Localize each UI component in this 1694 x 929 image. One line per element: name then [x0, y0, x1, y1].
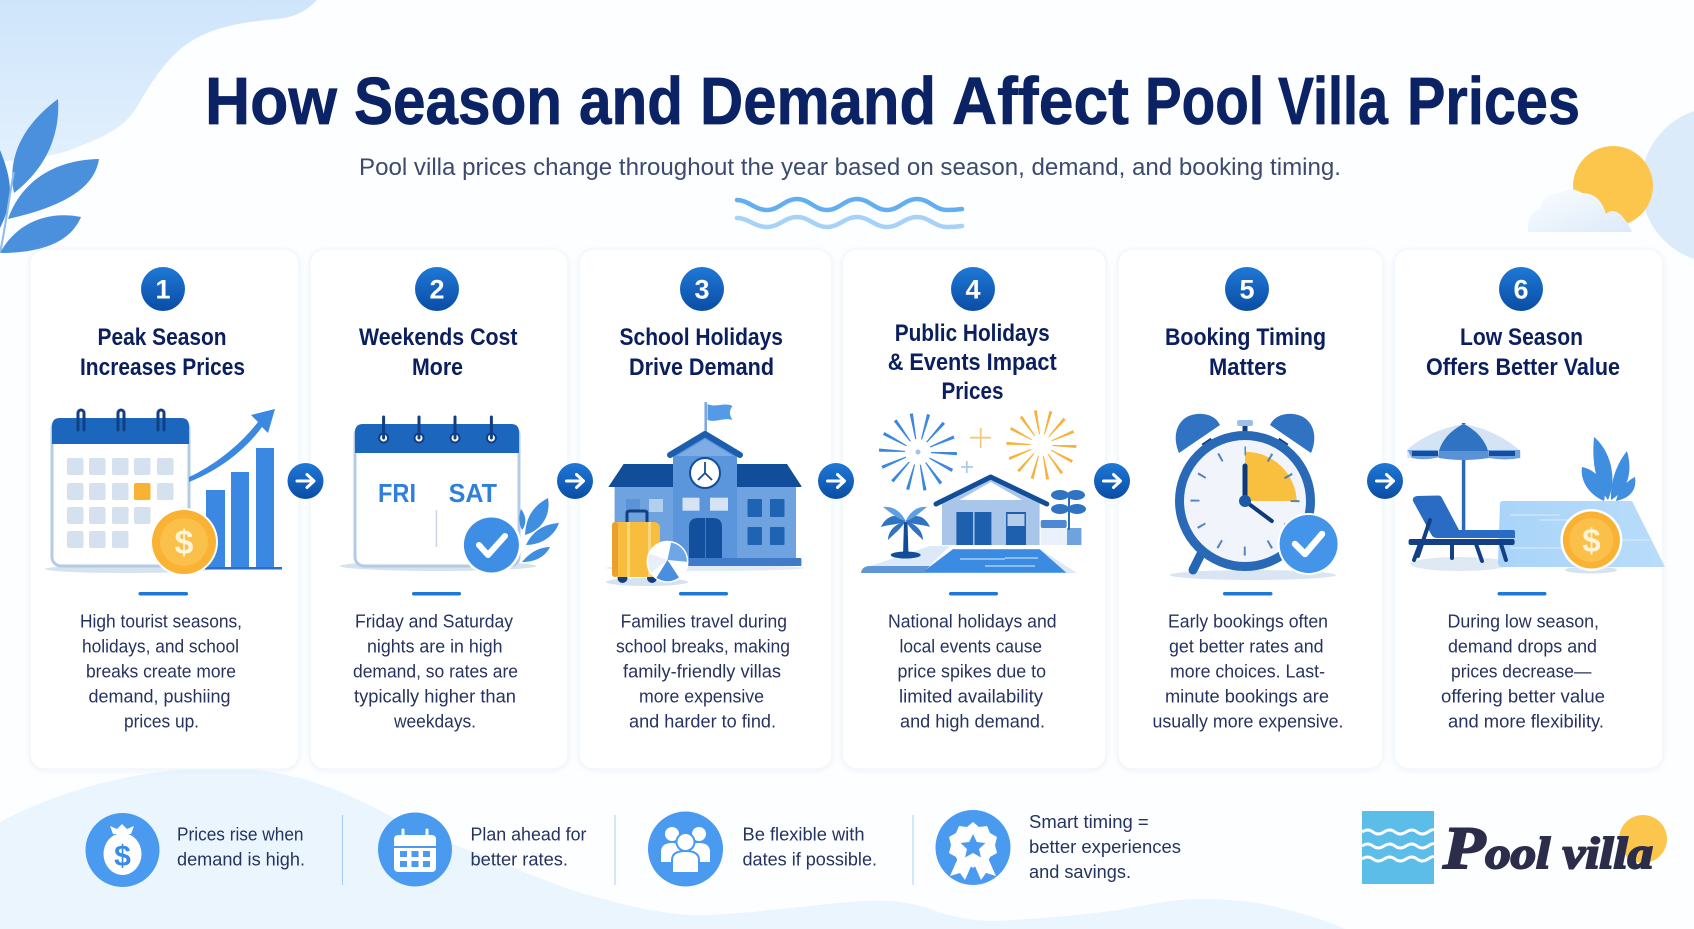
- arrow 5: [1367, 463, 1403, 499]
- description: and more flexibility.: [1448, 712, 1604, 732]
- description: and harder to find.: [629, 712, 776, 732]
- heading: [888, 320, 1057, 405]
- description: During low season,: [1448, 612, 1599, 632]
- text: [177, 824, 305, 870]
- badge 3: [680, 267, 724, 311]
- title: [205, 64, 1580, 139]
- heading: [1165, 324, 1326, 381]
- description: holidays, and school: [82, 636, 239, 656]
- description: Early bookings often: [1168, 612, 1328, 632]
- badge 2: 2: [429, 274, 445, 304]
- icon: money bag: $: [114, 840, 131, 873]
- arrow 1: [288, 463, 324, 499]
- panel: booking timing: [1118, 249, 1383, 769]
- illustration: fireworks over pool villa: [861, 422, 1086, 573]
- text: Plan ahead for: [470, 824, 586, 844]
- heading: [359, 324, 518, 381]
- heading: [1426, 324, 1620, 381]
- logo: Pool villa: [1362, 811, 1667, 884]
- description: [1152, 612, 1344, 732]
- title: Season: [354, 64, 562, 139]
- illustration: weekend calendar with check: [340, 417, 559, 575]
- illustration: school with suitcase and beach ball: [606, 402, 804, 586]
- icon: sun and cloud: [1528, 146, 1653, 232]
- heading: & Events Impact: [888, 349, 1057, 376]
- wave divider: [737, 199, 962, 227]
- description: get better rates and: [1169, 636, 1324, 656]
- heading: Weekends Cost: [359, 324, 518, 351]
- panel: low season: [1394, 249, 1665, 769]
- panel: school holidays: [579, 249, 832, 769]
- text: Smart timing =: [1029, 812, 1149, 832]
- subtitle: Pool villa prices change throughout the year based on season, demand, and booking timing.: [359, 154, 1341, 181]
- title: Affect: [952, 64, 1129, 139]
- icon: leaves: [0, 99, 99, 253]
- description: limited availability: [899, 686, 1043, 706]
- arrow 2: [557, 463, 593, 499]
- title: and: [579, 64, 683, 139]
- divider dash: [1223, 592, 1272, 596]
- description: breaks create more: [86, 662, 236, 682]
- description: local events cause: [900, 636, 1042, 656]
- illustration: lounge chair, umbrella, pool and coin: $: [1582, 522, 1601, 559]
- heading: School Holidays: [620, 324, 783, 351]
- illustration: weekend calendar with check: FRI: [378, 478, 416, 508]
- title: Demand: [700, 64, 936, 139]
- heading: Offers Better Value: [1426, 354, 1620, 381]
- description: nights are in high: [367, 636, 502, 656]
- text: Prices rise when: [177, 824, 304, 844]
- logo: Pool villa: Pool villa: [1442, 815, 1653, 881]
- description: [888, 612, 1057, 732]
- description: Families travel during: [621, 612, 787, 632]
- heading: Peak Season: [98, 324, 226, 351]
- text: [1029, 812, 1181, 882]
- icon: calendar: [378, 812, 452, 886]
- description: demand drops and: [1448, 636, 1597, 656]
- panel: public holidays: [842, 249, 1106, 769]
- divider dash: [679, 592, 728, 596]
- text: [742, 824, 877, 870]
- panel: weekends: [310, 249, 568, 769]
- description: Friday and Saturday: [355, 612, 513, 632]
- heading: Low Season: [1460, 324, 1583, 351]
- divider dash: [949, 592, 998, 596]
- divider dash: [1498, 592, 1546, 596]
- badge 1: [141, 267, 185, 311]
- description: more expensive: [639, 686, 764, 706]
- heading: Increases Prices: [80, 354, 245, 381]
- heading: More: [412, 354, 463, 381]
- tip: be flexible: [648, 812, 877, 886]
- title: Villa: [1278, 64, 1389, 139]
- background blob: top-left: [0, 0, 317, 161]
- heading: [80, 324, 245, 381]
- icon: people: [648, 812, 723, 886]
- text: Be flexible with: [742, 824, 864, 844]
- description: prices decrease—: [1451, 662, 1591, 682]
- text: dates if possible.: [742, 850, 877, 870]
- tip: plan ahead: [378, 812, 586, 886]
- description: National holidays and: [888, 612, 1057, 632]
- description: [1441, 612, 1605, 732]
- background blob: bottom: [0, 768, 1345, 929]
- arrow 4: [1094, 463, 1130, 499]
- illustration: lounge chair, umbrella, pool and coin: [1407, 423, 1665, 574]
- badge 4: [951, 267, 995, 311]
- badge 4: 4: [965, 274, 981, 304]
- description: more choices. Last-: [1170, 662, 1325, 682]
- illustration: weekend calendar with check: SAT: [449, 478, 497, 508]
- description: typically higher than: [354, 686, 516, 706]
- description: usually more expensive.: [1152, 712, 1344, 732]
- description: offering better value: [1441, 686, 1605, 706]
- heading: Booking Timing: [1165, 324, 1326, 351]
- description: and high demand.: [900, 712, 1045, 732]
- description: school breaks, making: [616, 636, 790, 656]
- badge 2: [415, 267, 459, 311]
- badge 6: [1499, 267, 1543, 311]
- badge 3: 3: [694, 274, 710, 304]
- illustration: alarm clock with check: [1170, 414, 1340, 580]
- divider dash: [138, 592, 188, 596]
- text: better experiences: [1029, 837, 1181, 857]
- panel: peak season: [30, 249, 299, 769]
- description: [616, 612, 790, 732]
- title: Prices: [1407, 64, 1580, 139]
- background blob: right: [1641, 107, 1694, 263]
- badge 5: [1225, 267, 1269, 311]
- badge 6: 6: [1513, 274, 1529, 304]
- description: minute bookings are: [1165, 686, 1329, 706]
- description: [353, 612, 518, 732]
- heading: [620, 324, 783, 381]
- description: weekdays.: [393, 712, 476, 732]
- description: family-friendly villas: [623, 662, 781, 682]
- text: better rates.: [470, 850, 568, 870]
- badge 1: 1: [155, 274, 171, 304]
- icon: award badge: [936, 810, 1010, 885]
- text: [470, 824, 586, 870]
- heading: Public Holidays: [895, 320, 1050, 347]
- icon: money bag: [86, 813, 160, 887]
- text: demand is high.: [177, 850, 305, 870]
- tip: prices rise: [86, 813, 305, 887]
- description: [80, 612, 242, 732]
- heading: Drive Demand: [629, 354, 774, 381]
- description: prices up.: [124, 712, 199, 732]
- illustration: calendar with rising bars and coin: [45, 409, 282, 576]
- description: demand, pushiing: [88, 686, 230, 706]
- description: price spikes due to: [898, 662, 1046, 682]
- heading: Matters: [1209, 354, 1287, 381]
- text: and savings.: [1029, 862, 1131, 882]
- badge 5: 5: [1239, 274, 1255, 304]
- title: How: [205, 64, 338, 139]
- description: High tourist seasons,: [80, 612, 242, 632]
- description: demand, so rates are: [353, 662, 518, 682]
- arrow 3: [818, 463, 854, 499]
- divider dash: [412, 592, 461, 596]
- illustration: calendar with rising bars and coin: $: [175, 524, 194, 562]
- tip: smart timing: [936, 810, 1181, 885]
- title: Pool: [1145, 64, 1264, 139]
- heading: Prices: [942, 378, 1004, 405]
